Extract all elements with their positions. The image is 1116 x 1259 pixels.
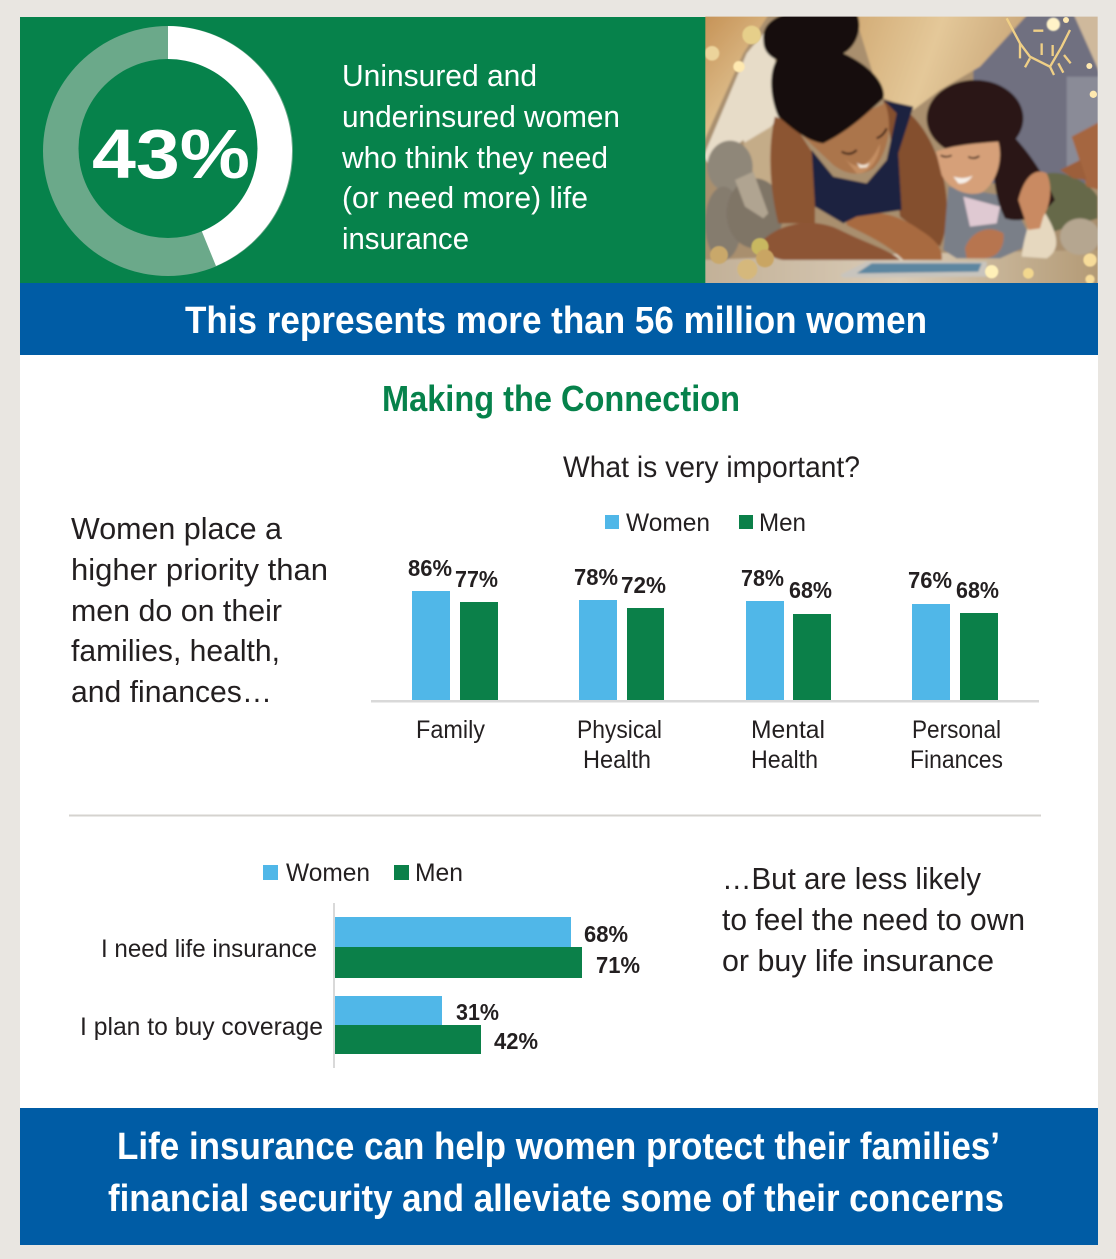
bars: personal finances: Personal — [912, 716, 1001, 744]
chart title: What is very important? — [563, 451, 860, 484]
donut chart: 43% — [43, 26, 293, 276]
woman's arms and shoulders — [770, 117, 815, 223]
banner: 56 million women — [20, 283, 1098, 355]
legend: Women — [626, 509, 710, 537]
text block: women priorities — [71, 511, 328, 709]
heading: Making the Connection: Making the Connection — [382, 378, 740, 419]
bars: mental health: Mental — [751, 716, 825, 744]
girl's face — [936, 142, 1000, 194]
text block: less likely: or buy life insurance — [722, 943, 994, 978]
text block: women priorities: Women place a — [71, 511, 283, 546]
bars: personal finances: 68% — [956, 577, 999, 603]
bars: family: 86% — [408, 555, 452, 581]
girl's hands — [1018, 172, 1050, 230]
text block: women priorities: and finances… — [71, 674, 272, 709]
bar chart: what is very important — [371, 451, 1039, 774]
woman's hair — [763, 13, 884, 143]
footer banner: financial security and alleviate some of their concerns — [108, 1178, 1004, 1220]
girl's hair — [927, 80, 1055, 220]
bars: physical health: Physical — [577, 716, 662, 744]
legend: Women — [286, 859, 370, 887]
bars: mental health — [741, 565, 832, 774]
row: I plan to buy coverage: 42% — [494, 1028, 538, 1054]
text block: women priorities: higher priority than — [71, 552, 328, 587]
footer banner: Life insurance can help women protect their families’ — [117, 1126, 1000, 1168]
text block: less likely: …But are less likely — [722, 861, 981, 896]
footer banner — [20, 1108, 1098, 1245]
text block: less likely — [722, 861, 1025, 978]
header text: who think they need — [341, 140, 608, 175]
legend: Men — [415, 859, 463, 887]
fairy lights — [705, 17, 1097, 284]
header text: Uninsured and — [342, 58, 537, 93]
bars: physical health: Health — [583, 746, 651, 774]
row: I need life insurance: 68% — [584, 921, 628, 947]
legend — [263, 859, 463, 887]
plush rabbit — [707, 141, 753, 193]
axis — [371, 700, 1039, 702]
bars: personal finances — [908, 567, 1003, 774]
bars: physical health: 78% — [574, 564, 618, 590]
row: I plan to buy coverage: I plan to buy coverage — [80, 1013, 323, 1041]
banner: 56 million women: This represents more than 56 million women — [185, 300, 927, 342]
bars: personal finances: 76% — [908, 567, 952, 593]
bars: mental health: 78% — [741, 565, 784, 591]
bars: family: Family — [416, 716, 485, 744]
bars: personal finances: Finances — [910, 746, 1003, 774]
tablet — [840, 262, 987, 278]
row: I plan to buy coverage: 31% — [456, 999, 499, 1025]
row: I need life insurance: I need life insurance — [101, 935, 317, 963]
girl's body and striped sleeve — [943, 187, 1033, 258]
legend — [605, 509, 806, 537]
legend: Men — [759, 509, 806, 537]
text block: less likely: to feel the need to own — [722, 902, 1025, 937]
text block: women priorities: men do on their — [71, 593, 282, 628]
row: I need life insurance — [101, 917, 640, 978]
header text: insurance — [342, 221, 469, 256]
bars: mental health: 68% — [789, 577, 832, 603]
header text — [341, 58, 620, 256]
text block: women priorities: families, health, — [71, 633, 280, 668]
bar chart: life insurance need — [80, 859, 640, 1068]
header text: (or need more) life — [342, 180, 588, 215]
bars: family — [408, 555, 498, 744]
bars: physical health: 72% — [621, 572, 666, 598]
donut value: 43% — [92, 115, 250, 193]
header text: underinsured women — [342, 99, 620, 134]
bed — [705, 250, 1098, 283]
woman's face — [800, 103, 889, 174]
bars: family: 77% — [455, 566, 498, 592]
bars: physical health — [574, 564, 666, 774]
white content panel — [20, 355, 1098, 1108]
row: I plan to buy coverage — [80, 996, 538, 1054]
photo: mother and daughter looking at a tablet — [705, 16, 1098, 283]
panel: green header — [20, 17, 706, 283]
bars: mental health: Health — [751, 746, 818, 774]
row: I need life insurance: 71% — [596, 952, 640, 978]
navy tank top — [812, 100, 913, 223]
axis — [333, 903, 335, 1068]
